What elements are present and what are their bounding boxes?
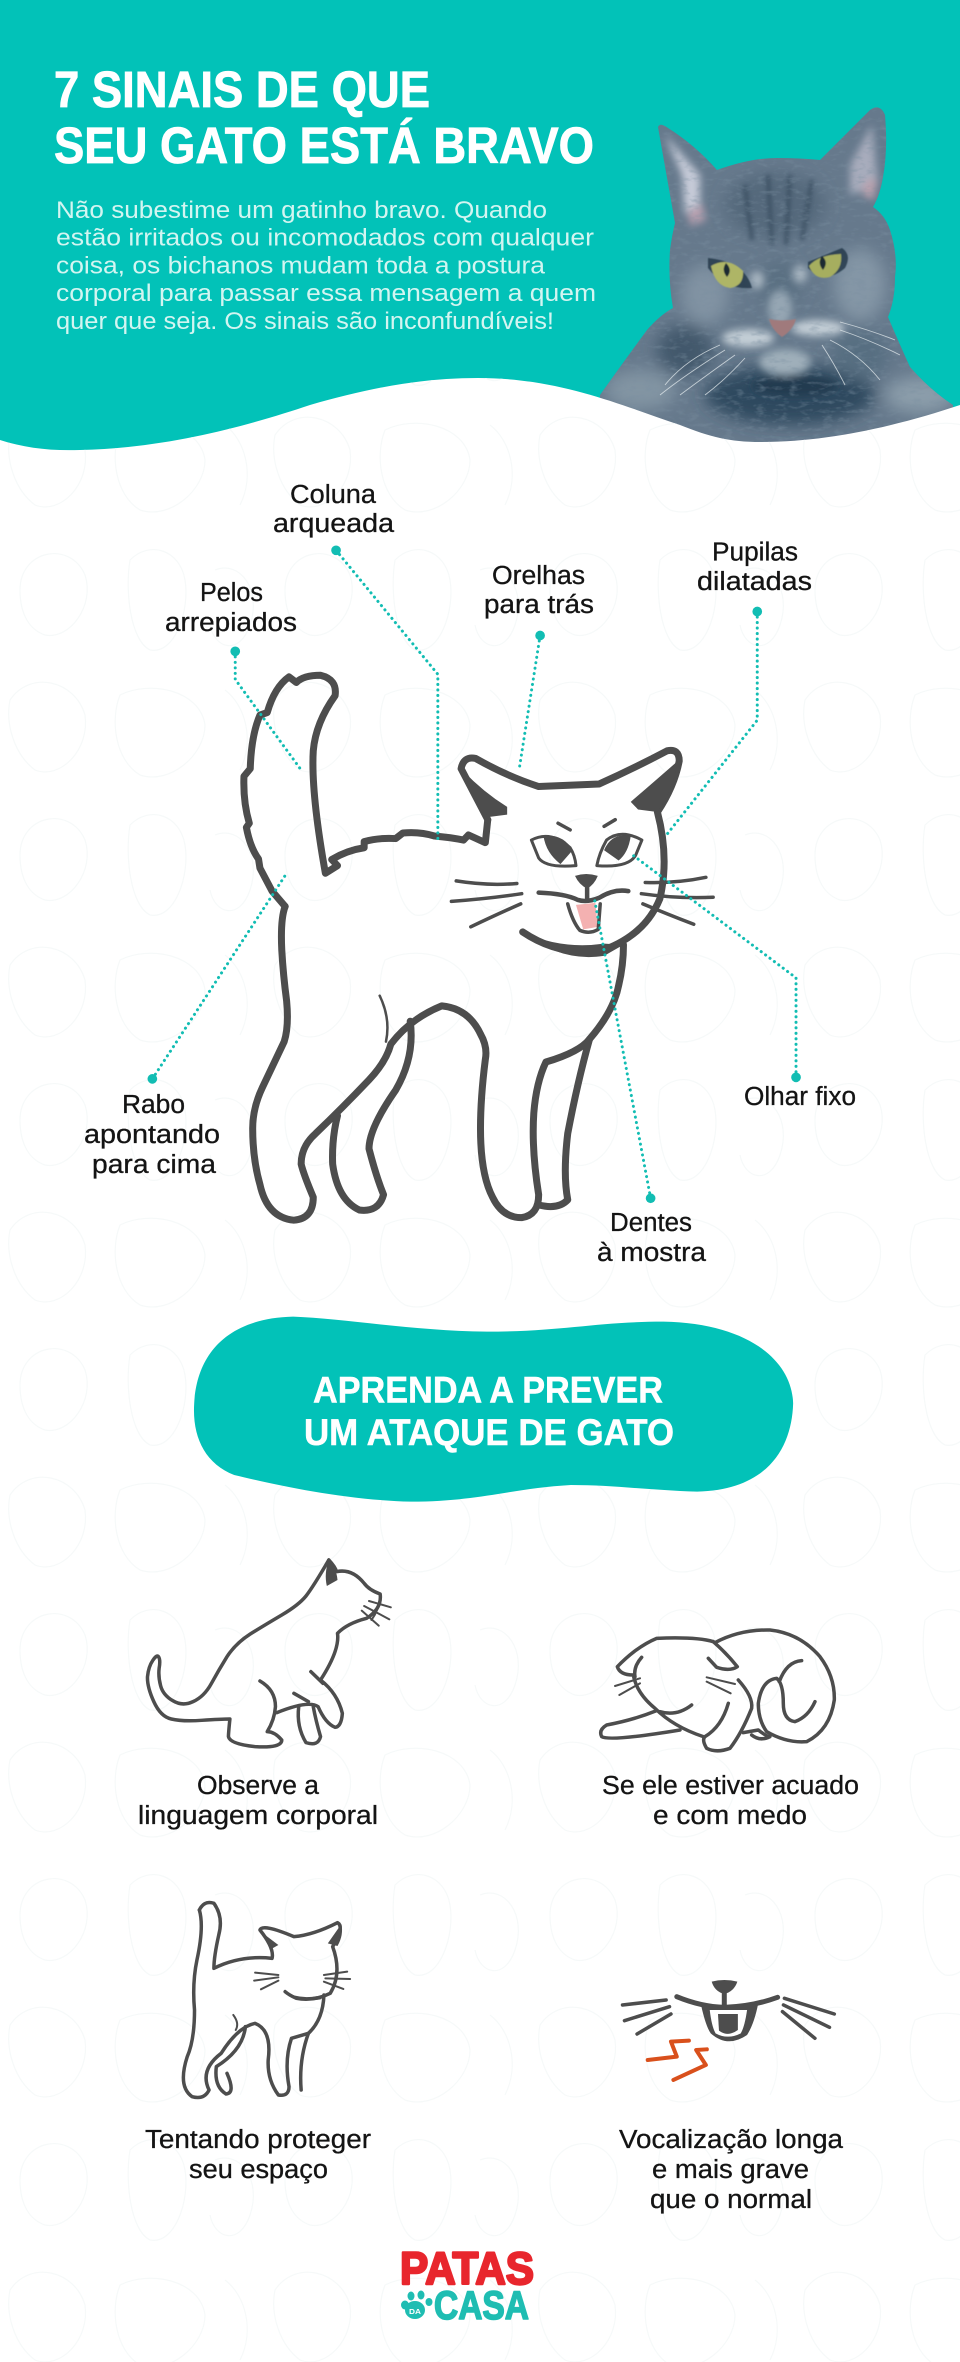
label: rabo apontando para cima: apontando	[84, 1121, 220, 1149]
title: 7 SINAIS DE QUE	[54, 61, 430, 118]
label: observe a linguagem corporal: linguagem corporal	[138, 1802, 378, 1830]
icon: crouched cat	[601, 1630, 834, 1751]
label: tentando proteger seu espaço: Tentando proteger	[145, 2126, 372, 2154]
intro paragraph: Não subestime um gatinho bravo. Quando	[56, 197, 547, 224]
label: pelos arrepiados	[165, 579, 297, 637]
intro paragraph: corporal para passar essa mensagem a quem	[56, 280, 596, 307]
intro paragraph: quer que seja. Os sinais são inconfundíveis!	[56, 308, 554, 335]
banner heading	[304, 1370, 674, 1453]
title: SEU GATO ESTÁ BRAVO	[54, 117, 594, 174]
main cat diagram	[148, 545, 801, 1220]
label: pelos arrepiados: Pelos	[200, 579, 263, 607]
intro paragraph: estão irritados ou incomodados com qualquer	[56, 225, 594, 252]
label: orelhas para trás	[484, 562, 594, 619]
cat body and tail outline	[244, 675, 679, 1220]
logo: patas da casa: PATAS	[400, 2243, 534, 2294]
section banner blob	[194, 1317, 793, 1502]
label: observe a linguagem corporal	[138, 1772, 378, 1830]
label: vocalização longa e mais grave que o normal	[619, 2126, 844, 2214]
label: pupilas dilatadas	[697, 538, 812, 596]
label: coluna arqueada	[273, 481, 395, 538]
label: tentando proteger seu espaço	[145, 2126, 372, 2184]
logo: patas da casa: CASA	[434, 2284, 529, 2328]
label: rabo apontando para cima: para cima	[92, 1151, 217, 1179]
cat ears and face	[380, 761, 713, 1042]
label: rabo apontando para cima: Rabo	[122, 1091, 185, 1119]
annotation lines	[152, 550, 796, 1198]
label: pelos arrepiados: arrepiados	[165, 609, 297, 637]
label: dentes à mostra: Dentes	[610, 1209, 692, 1237]
icon: snarling mouth with low growl	[623, 1980, 834, 2080]
label: vocalização longa e mais grave que o normal: e mais grave	[652, 2156, 809, 2184]
logo: patas da casa	[400, 2243, 534, 2328]
label: rabo apontando para cima	[84, 1091, 220, 1179]
annotation dots	[148, 545, 801, 1203]
label: tentando proteger seu espaço: seu espaço	[189, 2156, 328, 2184]
intro paragraph: coisa, os bichanos mudam toda a postura	[56, 252, 546, 279]
banner heading: APRENDA A PREVER	[313, 1370, 663, 1410]
label: pupilas dilatadas: dilatadas	[697, 568, 812, 596]
label: vocalização longa e mais grave que o normal: que o normal	[650, 2186, 812, 2214]
label: pupilas dilatadas: Pupilas	[712, 538, 798, 566]
banner heading: UM ATAQUE DE GATO	[304, 1412, 674, 1453]
label: dentes à mostra	[597, 1209, 707, 1267]
title	[54, 61, 594, 174]
label: orelhas para trás: para trás	[484, 591, 594, 619]
intro paragraph	[56, 197, 596, 335]
label: olhar fixo: Olhar fixo	[744, 1083, 856, 1111]
icon: standing cat with arched back	[183, 1902, 350, 2097]
label: dentes à mostra: à mostra	[597, 1239, 707, 1267]
icon: paw: DA	[409, 2309, 421, 2316]
label: se ele estiver acuado e com medo: Se ele estiver acuado	[602, 1772, 859, 1800]
icon: sitting cat	[147, 1560, 391, 1747]
label: se ele estiver acuado e com medo	[602, 1772, 859, 1830]
label: coluna arqueada: arqueada	[273, 510, 395, 538]
photo: grey angry cat	[600, 107, 953, 442]
label: orelhas para trás: Orelhas	[492, 562, 585, 590]
label: se ele estiver acuado e com medo: e com medo	[653, 1802, 807, 1830]
label: coluna arqueada: Coluna	[290, 481, 377, 509]
header background	[0, 0, 960, 460]
label: vocalização longa e mais grave que o normal: Vocalização longa	[619, 2126, 844, 2154]
label: observe a linguagem corporal: Observe a	[197, 1772, 320, 1800]
